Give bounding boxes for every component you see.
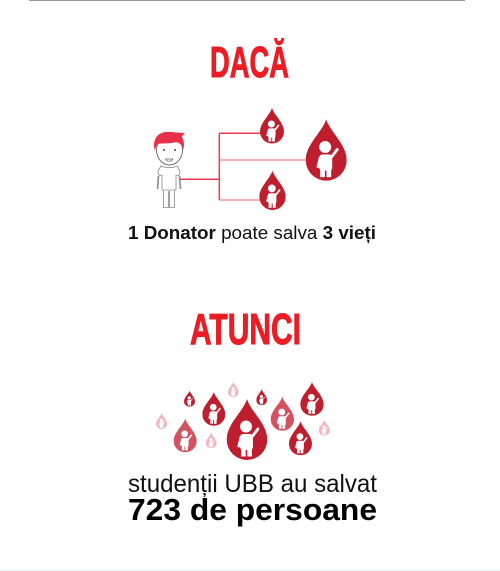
heading: ATUNCI: ATUNCI — [190, 305, 301, 354]
icon: small drop top — [260, 108, 284, 143]
caption: students line: studenții UBB au salvat — [128, 470, 377, 498]
caption: 1 donor can save 3 lives: 1 Donator poate salva 3 vieți — [128, 223, 376, 243]
heading: DACĂ: DACĂ — [210, 37, 289, 87]
icon: small drop bottom — [259, 171, 286, 210]
top divider line — [29, 0, 465, 1]
connector lines — [180, 133, 306, 200]
caption: 723 people: 723 de persoane — [128, 492, 377, 527]
icon: donor person — [154, 132, 185, 208]
icon group: many drops — [156, 382, 330, 460]
bottom edge line — [0, 570, 500, 571]
icon: large drop — [306, 119, 347, 181]
